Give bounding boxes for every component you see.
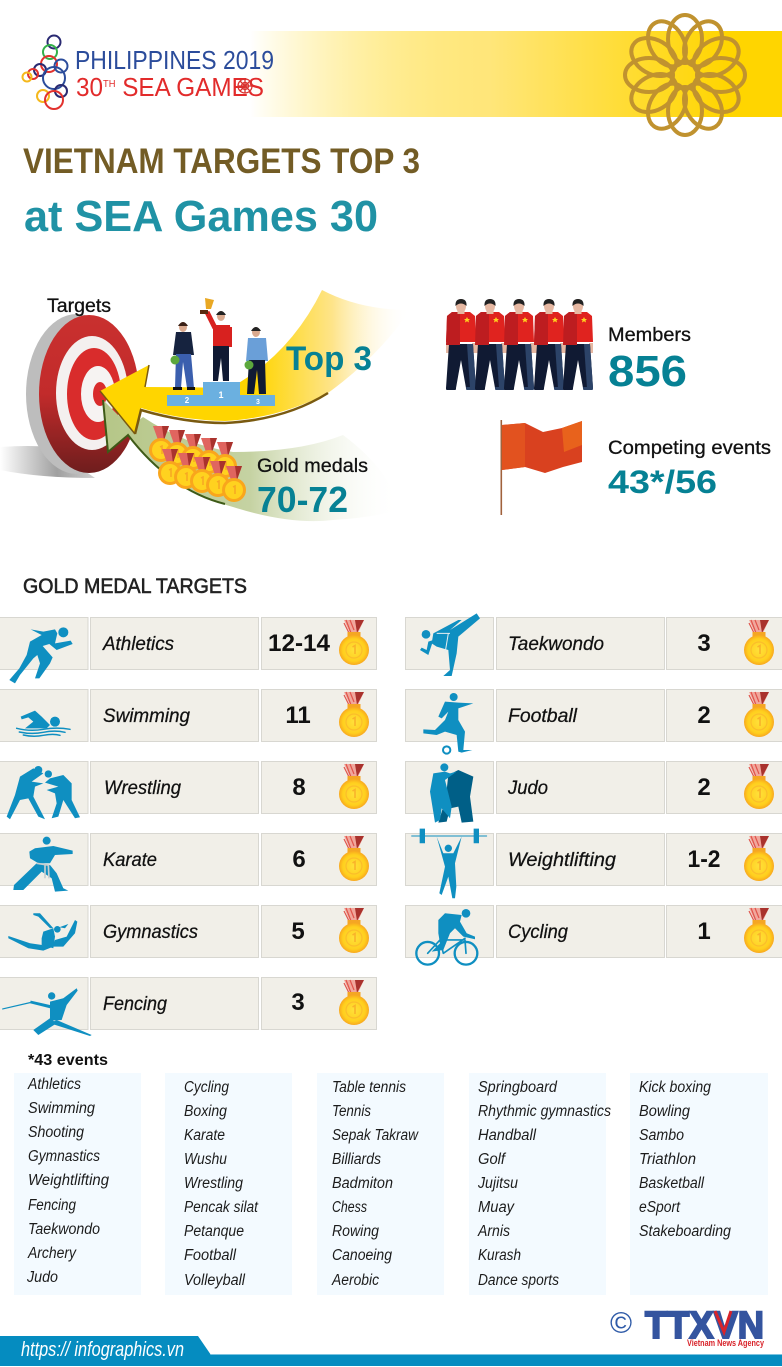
list column 1: Athletics [27,1076,81,1093]
list column 3: Billiards [332,1151,381,1168]
value: top 3: Top 3 [286,340,372,378]
title line 2: at SEA Games 30 [24,192,378,241]
list column 2: Wushu [184,1151,227,1168]
row: cycling: Cycling [508,922,568,943]
row: athletics: 12-14 [268,630,331,657]
label: gold medals: Gold medals [257,456,368,477]
icon: gymnast [8,913,77,951]
list column 1: Shooting [28,1124,84,1141]
list column 4: Rhythmic gymnastics [478,1103,611,1120]
list column 2: Boxing [184,1103,227,1120]
row: fencing [0,978,376,1036]
row: gymnastics: 5 [291,918,305,945]
row: swimming [0,690,376,742]
list column 1: Archery [27,1245,77,1262]
row: wrestling: Wrestling [104,778,181,799]
row: athletics: Athletics [102,634,174,655]
title line 1: VIETNAM TARGETS TOP 3 [23,142,420,181]
row: fencing: 3 [291,989,305,1016]
value: 856: 856 [608,347,687,396]
icon: fencer [3,988,92,1036]
list column 1 [14,1073,141,1295]
list column 4: Dance sports [478,1272,559,1289]
list column 5: Kick boxing [639,1079,711,1096]
row: judo [406,762,782,823]
logo text: 30th SEA Games: SEA GAMES [115,72,264,102]
list column 5: Triathlon [639,1151,696,1168]
icon: small flower in logo [238,79,252,93]
list column 3: Badmiton [332,1175,393,1192]
row: taekwondo: 3 [697,630,711,657]
header band [250,31,782,117]
logo: TTXVN: Vietnam News Agency [687,1338,764,1348]
list column 4 [469,1073,611,1295]
value: 70-72: 70-72 [257,479,348,520]
list column 4: Golf [478,1151,507,1168]
podium [167,382,275,406]
heading: gold medal targets: GOLD MEDAL TARGETS [23,575,247,598]
arrow: top 3 swoosh [100,290,410,434]
row: weightlifting: Weightlifting [508,850,616,871]
icon: wrestlers [7,766,80,819]
icon: swimmer [17,711,70,736]
row: fencing: Fencing [103,994,167,1015]
list column 2: Karate [184,1127,225,1144]
row: karate: Karate [103,850,157,871]
gold medals pile [149,426,246,502]
icon: footballer [423,693,473,754]
row: gymnastics: Gymnastics [103,922,198,943]
row: football: Football [508,706,578,727]
row: gymnastics [0,906,376,958]
icon: cyclist [416,909,477,965]
list column 3: Canoeing [332,1247,392,1264]
list column 3: Rowing [332,1223,379,1240]
footer bar [0,1336,782,1366]
logo: SEA Games rings [22,36,68,109]
list column 5: Stakeboarding [639,1223,731,1240]
icon: judo fighters [430,763,473,823]
list column 1: Judo [26,1269,58,1286]
list column 2 [165,1073,292,1295]
list column 3 [317,1073,444,1295]
icon: weightlifter [412,829,487,898]
list column 2: Wrestling [184,1175,243,1192]
row: taekwondo [406,613,782,676]
list column 1: Weightlifting [28,1172,109,1189]
icon: red flag [500,420,582,515]
list column 4: Kurash [478,1247,521,1264]
copyright mark: © [610,1307,632,1340]
list column 3: Table tennis [332,1079,406,1096]
row: wrestling [0,762,376,819]
list column 1: Gymnastics [28,1148,100,1165]
row: judo: Judo [507,778,548,799]
panel: targets graphic [0,290,410,521]
podium: 2 [185,396,190,405]
list column 2: Football [184,1247,237,1264]
icon: runner [9,627,73,683]
list column 5: Bowling [639,1103,690,1120]
icon: games flower emblem [625,15,745,135]
athletes on podium [170,298,268,394]
value: 43/56: 43*/56 [608,464,717,500]
list column 1: Fencing [28,1197,76,1214]
list column 5: Basketball [639,1175,705,1192]
list column 4: Springboard [478,1079,558,1096]
icon: team members [446,299,593,390]
footer url: https:// infographics.vn [21,1339,184,1361]
list column 3: Tennis [332,1103,371,1120]
icon: target board [26,314,139,474]
list column 5: eSport [639,1199,681,1216]
arrow: gold medals swoosh [103,400,400,521]
list column 1: Taekwondo [28,1221,100,1238]
target shadow [0,446,95,478]
podium: 3 [256,399,260,406]
list column 3: Chess [332,1199,367,1216]
row: karate: 6 [292,846,306,873]
list column 4: Arnis [477,1223,510,1240]
row: karate [0,834,376,892]
list column 4: Muay [478,1199,515,1216]
logo text: 30th SEA Games: 30 [76,72,105,102]
list column 2: Cycling [184,1079,229,1096]
list column 3: Sepak Takraw [332,1127,420,1144]
list column 4: Jujitsu [477,1175,518,1192]
row: swimming: 11 [285,702,311,729]
row: cycling [406,906,782,965]
row: athletics [0,618,376,683]
label: members: Members [608,325,691,346]
row: weightlifting [406,829,782,898]
row: weightlifting: 1-2 [688,846,720,873]
list column 2: Volleyball [184,1272,246,1289]
podium: 1 [218,390,224,400]
logo text: Philippines 2019: PHILIPPINES 2019 [75,45,274,75]
row: football [406,690,782,754]
row: judo: 2 [697,774,711,801]
heading: 43 events: *43 events [28,1052,108,1069]
list column 2: Pencak silat [184,1199,259,1216]
list column 3: Aerobic [331,1272,379,1289]
row: swimming: Swimming [103,706,190,727]
row: taekwondo: Taekwondo [508,634,604,655]
label: competing events: Competing events [608,438,771,459]
list column 4: Handball [478,1127,537,1144]
row: football: 2 [697,702,711,729]
row: cycling: 1 [697,918,711,945]
icon: karateka [13,837,73,892]
logo: TTXVN: TTXVN [645,1305,764,1347]
list column 5: Sambo [639,1127,684,1144]
label: targets: Targets [47,296,111,317]
logo text: 30th SEA Games: TH [103,79,115,90]
row: wrestling: 8 [292,774,306,801]
list column 5 [630,1073,768,1295]
list column 1: Swimming [28,1100,95,1117]
list column 2: Petanque [184,1223,244,1240]
icon: taekwondo kick [420,613,480,676]
